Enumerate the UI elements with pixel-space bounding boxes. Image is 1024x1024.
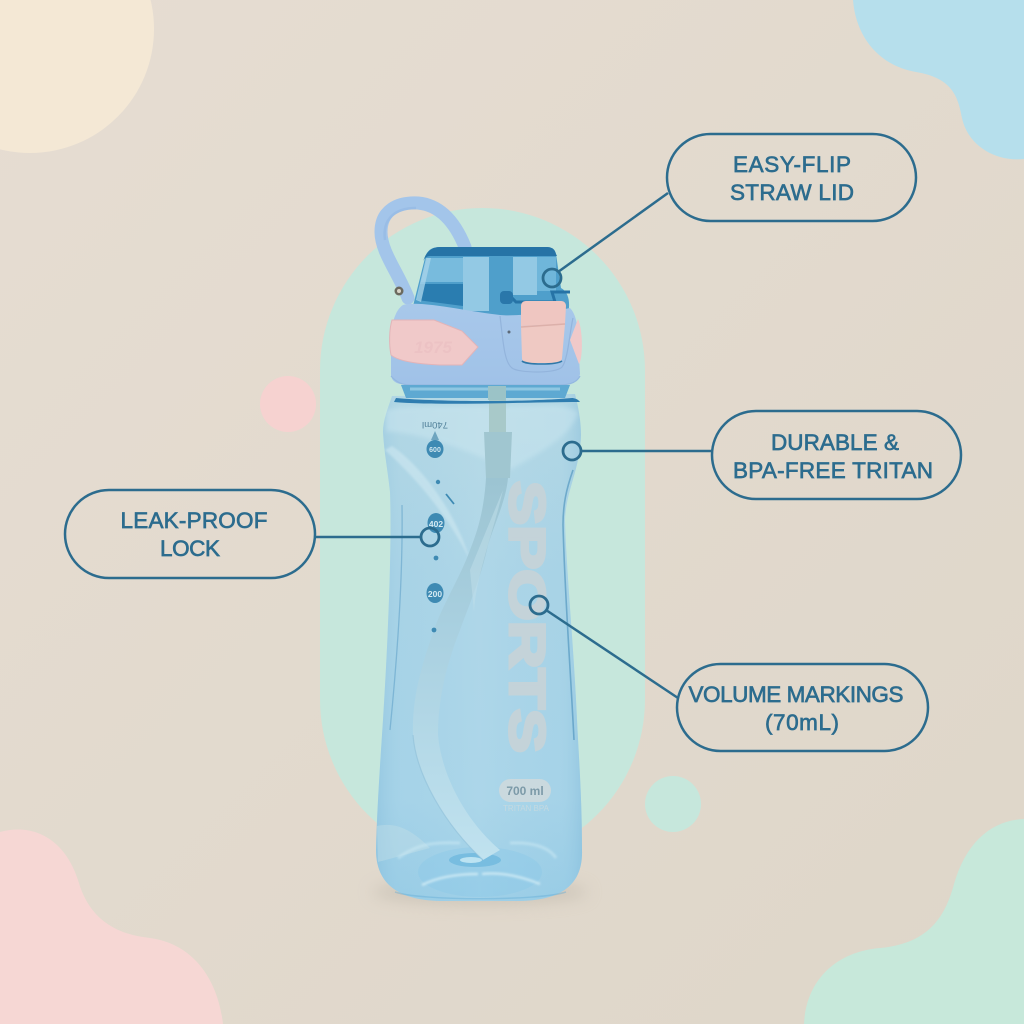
decorative blob: pink bottom-left: [0, 829, 223, 1024]
callout: leak-proof lock: LOCK: [160, 536, 220, 561]
pink grip: [390, 319, 582, 365]
callout: easy-flip straw lid: EASY-FLIP: [733, 152, 851, 177]
marking badge middle: [428, 513, 444, 533]
marking badge middle: 402: [429, 519, 443, 529]
straw: [413, 395, 512, 860]
flip lid dome: [413, 247, 570, 318]
mint pill backdrop: [320, 208, 645, 862]
pink grip: 1975: [414, 338, 452, 357]
decorative circle: mint: [645, 776, 701, 832]
callout: volume markings: [530, 596, 928, 751]
callout: easy-flip straw lid: [543, 134, 916, 287]
handle rivet: [394, 286, 404, 296]
bottle body: [376, 394, 582, 901]
callout: leak-proof lock: [65, 490, 439, 578]
SPORTS lettering: SPORTS: [499, 481, 555, 753]
decorative blob: blue top-right: [853, 0, 1024, 159]
callout: volume markings: VOLUME MARKINGS: [688, 682, 904, 707]
bottle ground shadow: [372, 880, 588, 904]
pink lock latch: [521, 301, 566, 364]
marking badge top: [426, 440, 444, 458]
capacity badge: TRITAN BPA: [503, 804, 550, 813]
callout: volume markings: (70mL): [765, 710, 839, 735]
decorative circle: pink: [260, 376, 316, 432]
callout: durable and BPA-free Tritan: BPA-FREE TRITAN: [733, 458, 933, 483]
bottle neck ring: [394, 385, 580, 404]
callout: durable and BPA-free Tritan: DURABLE &: [771, 430, 899, 455]
callout: durable and BPA-free Tritan: [563, 411, 961, 499]
capacity badge: [499, 779, 551, 813]
volume markings: 740ml: [422, 419, 448, 430]
marking badge lower: 200: [428, 589, 442, 599]
marking badge top: 600: [429, 447, 441, 454]
marking badge lower: [426, 583, 444, 603]
capacity badge: 700 ml: [506, 784, 544, 798]
decorative blob: mint bottom-right: [804, 819, 1024, 1024]
callout: leak-proof lock: LEAK-PROOF: [120, 508, 268, 533]
carry handle: [381, 203, 465, 298]
volume markings: [422, 419, 454, 632]
callout: easy-flip straw lid: STRAW LID: [730, 180, 854, 205]
decorative blob: cream top-left: [0, 0, 154, 153]
water bottle: [372, 203, 588, 904]
lid collar: [391, 304, 580, 385]
